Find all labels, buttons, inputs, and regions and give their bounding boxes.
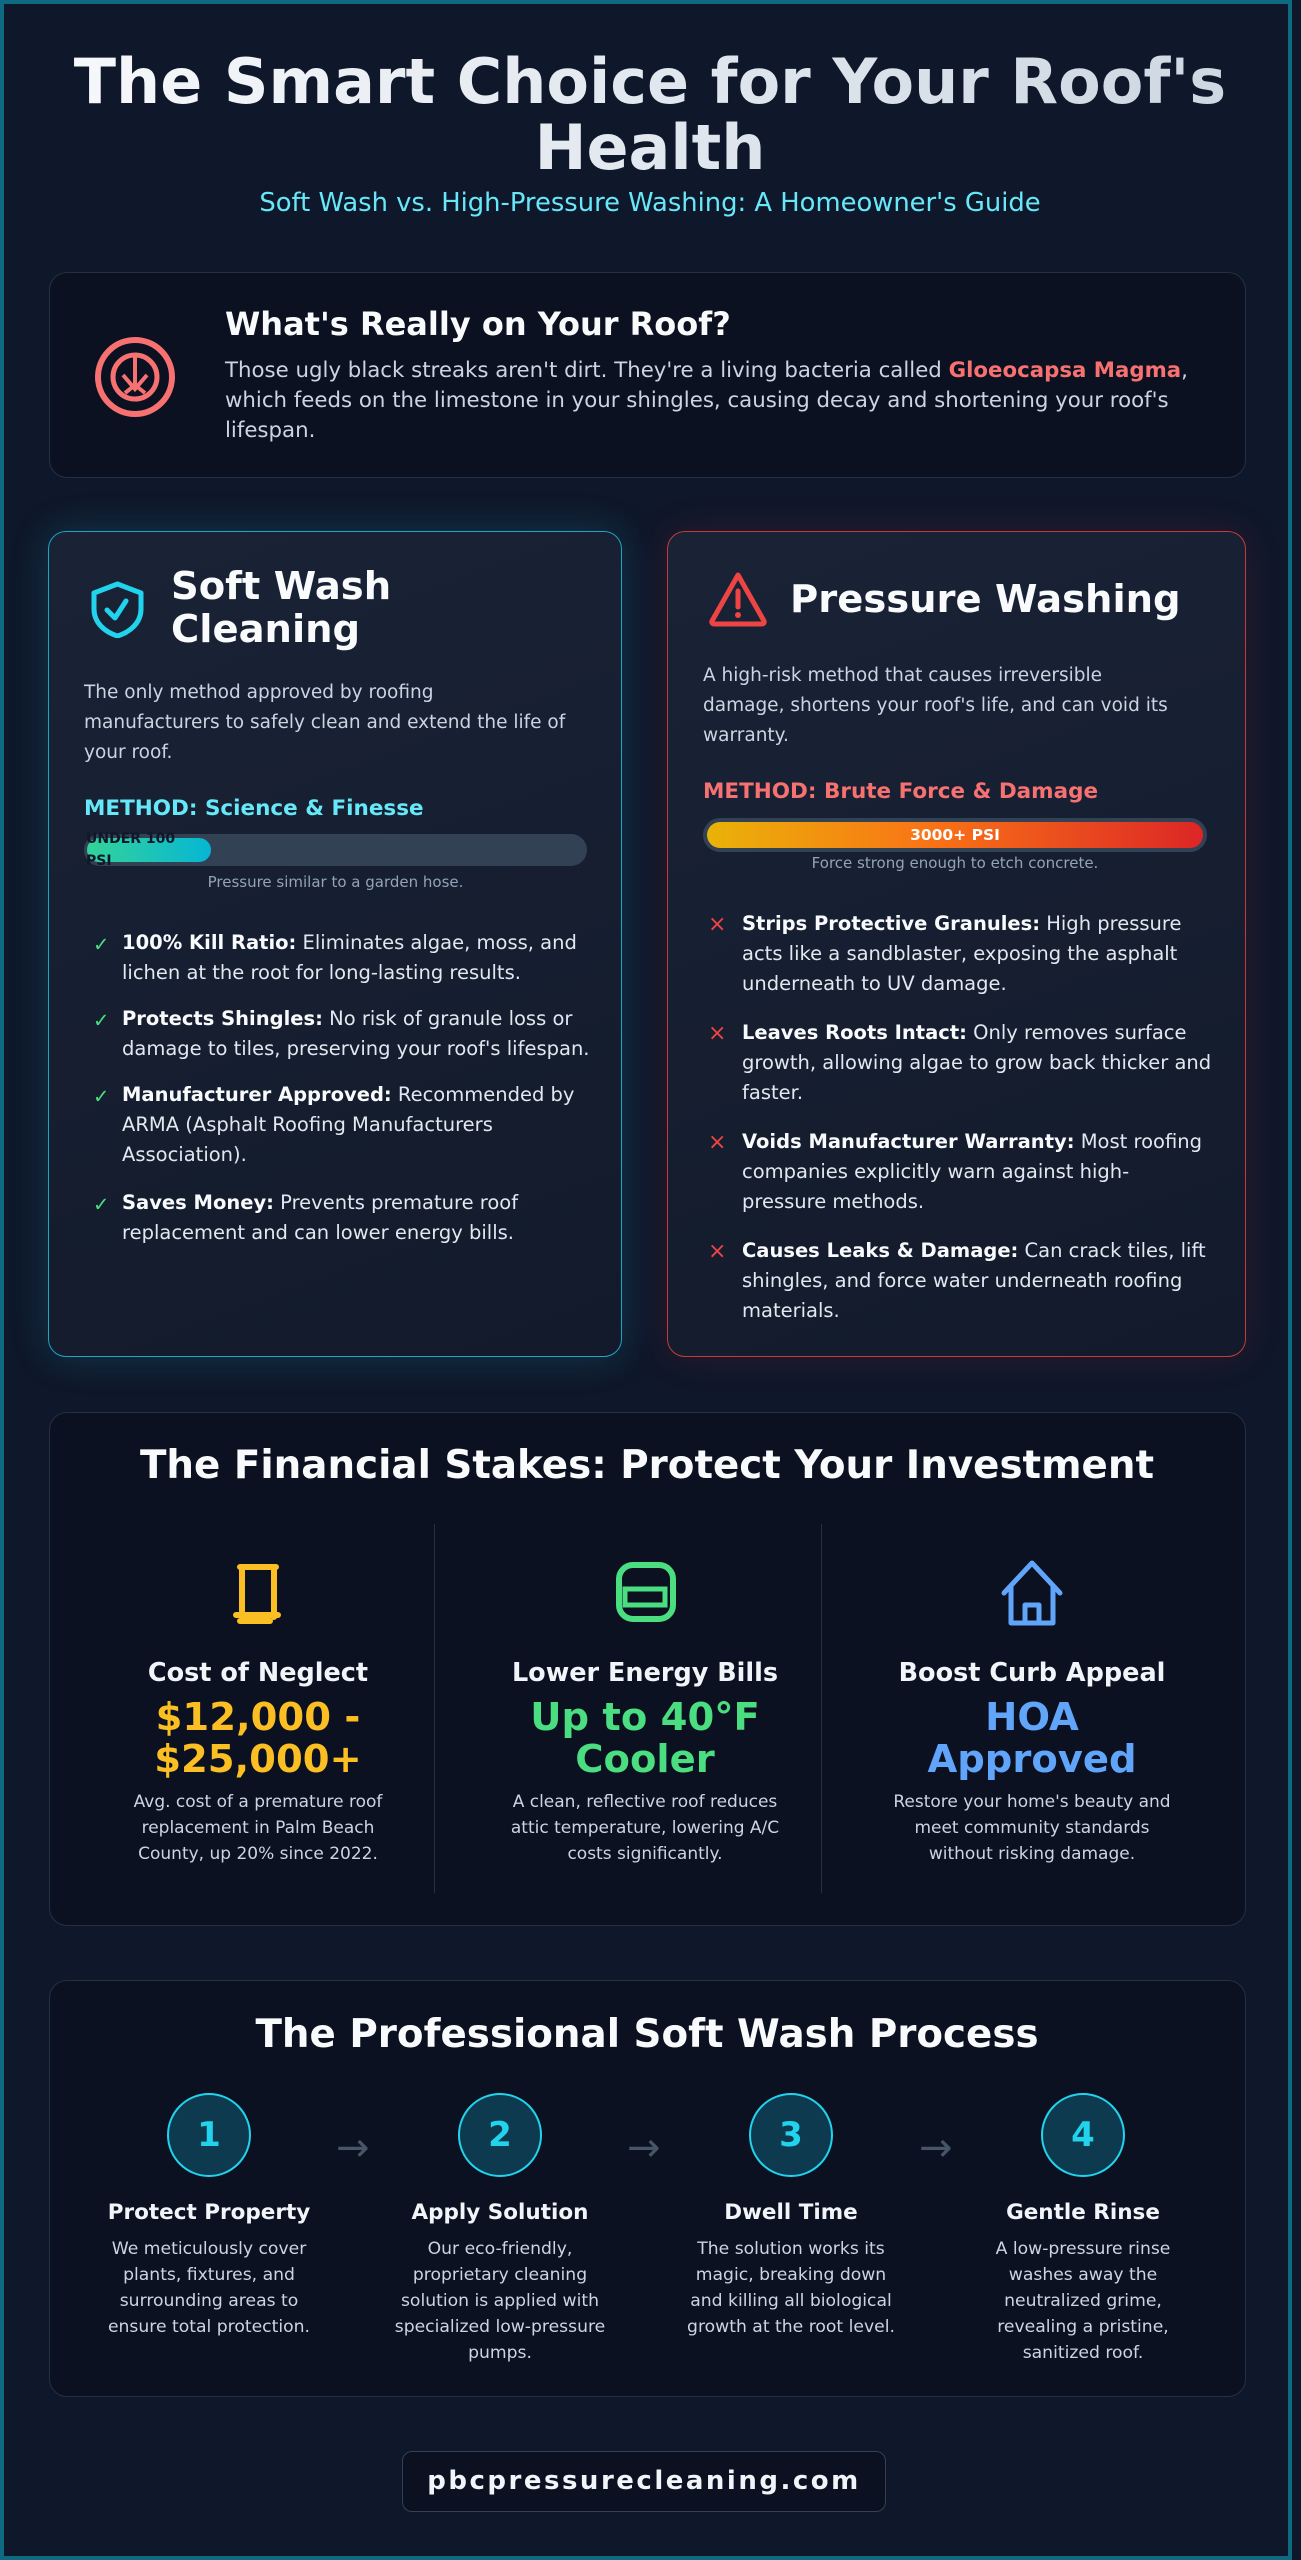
step text: ensure total protection. [108, 2317, 310, 2337]
arrow: → [919, 2125, 953, 2171]
circle number [167, 2093, 251, 2177]
step 3 [687, 2093, 895, 2337]
item: leaks [708, 1239, 1206, 1322]
label: Lower Energy Bills [512, 1658, 778, 1688]
circle number: 4 [1071, 2115, 1095, 2155]
description [893, 1792, 1171, 1864]
column: cost of neglect [134, 1564, 383, 1864]
item: strips granules: acts like a sandblaster, exposing the asphalt [742, 942, 1177, 965]
pressure bar: high [703, 818, 1207, 852]
step title: Protect Property [108, 2200, 310, 2225]
step text: A low-pressure rinse [996, 2239, 1170, 2259]
item: roots intact: growth, allowing algae to grow back thicker and [742, 1051, 1211, 1074]
item: kill ratio: ✓ [93, 933, 109, 956]
item: leaks: × [708, 1239, 726, 1264]
item: leaks: materials. [742, 1299, 840, 1322]
step text: We meticulously cover [112, 2239, 306, 2259]
item: protects shingles [93, 1007, 590, 1060]
heading: The Professional Soft Wash Process [255, 2012, 1039, 2057]
value: $12,000 - [156, 1695, 360, 1740]
value: Cooler [575, 1737, 715, 1782]
panel: financial stakes [49, 1412, 1246, 1926]
description: your roof. [84, 742, 172, 763]
step text: proprietary cleaning [413, 2265, 587, 2285]
value [927, 1695, 1137, 1782]
item: roots intact [708, 1021, 1211, 1104]
item: manufacturer approved: ✓ [93, 1085, 109, 1108]
step text [687, 2239, 895, 2337]
description: replacement in Palm Beach [142, 1818, 374, 1838]
icon: battery [616, 1562, 676, 1622]
pressure bar: soft: UNDER 100 PSI [86, 831, 175, 869]
heading [171, 564, 391, 652]
step text: specialized low-pressure [395, 2317, 605, 2337]
value: $25,000+ [154, 1737, 362, 1782]
step title: Gentle Rinse [1006, 2200, 1160, 2225]
footer: website [402, 2451, 886, 2512]
label: Cost of Neglect [148, 1658, 368, 1688]
icon: bacteria warning [95, 337, 175, 417]
item: saves money [93, 1191, 518, 1244]
pressure bar: soft [84, 834, 587, 866]
circle number [749, 2093, 833, 2177]
item: roots intact: faster. [742, 1081, 803, 1104]
footer: website: pbcpressurecleaning.com [427, 2466, 861, 2496]
circle number: 3 [779, 2115, 803, 2155]
step text: plants, fixtures, and [123, 2265, 295, 2285]
heading: Pressure Washing [790, 577, 1181, 622]
description: Avg. cost of a premature roof [134, 1792, 382, 1812]
pressure bar: high: 3000+ PSI [910, 826, 1000, 844]
icon: warning triangle [709, 572, 767, 626]
step text: washes away the [1009, 2265, 1157, 2285]
description: costs significantly. [567, 1844, 723, 1864]
value [530, 1695, 760, 1782]
column: energy bills [511, 1562, 779, 1864]
item: manufacturer approved: ARMA (Asphalt Roofing Manufacturers [122, 1113, 493, 1136]
item: voids warranty [708, 1130, 1202, 1213]
item: voids warranty: × [708, 1130, 726, 1155]
item: manufacturer approved [93, 1083, 574, 1166]
item: strips granules: × [708, 912, 726, 937]
item: manufacturer approved: Association). [122, 1143, 247, 1166]
circle number [458, 2093, 542, 2177]
item: protects shingles: ✓ [93, 1009, 109, 1032]
description: damage, shortens your roof's life, and can void its [703, 695, 1168, 716]
step text: pumps. [468, 2343, 532, 2363]
caption: Pressure similar to a garden hose. [208, 873, 463, 891]
description [511, 1792, 779, 1864]
heading: The Financial Stakes: Protect Your Investment [140, 1443, 1154, 1488]
step text: The solution works its [697, 2239, 885, 2259]
benefit list [93, 931, 590, 1244]
step text: sanitized roof. [1023, 2343, 1143, 2363]
panel: what's on your roof [49, 272, 1246, 478]
value: Up to 40°F [530, 1695, 760, 1740]
body text [224, 358, 1188, 443]
step text [108, 2239, 310, 2337]
method label: METHOD: Brute Force & Damage [703, 779, 1098, 804]
step title: Dwell Time [724, 2200, 858, 2225]
description [703, 665, 1168, 746]
step text: Our eco-friendly, [428, 2239, 572, 2259]
panel: soft wash card [48, 531, 622, 1357]
panel: pressure washing card [667, 531, 1246, 1357]
arrow: → [627, 2125, 661, 2171]
description: meet community standards [914, 1818, 1150, 1838]
description: warranty. [703, 725, 789, 746]
body text: lifespan. [225, 418, 315, 443]
circle number [1041, 2093, 1125, 2177]
step text: growth at the root level. [687, 2317, 895, 2337]
heading: Cleaning [171, 607, 360, 652]
step text [996, 2239, 1170, 2363]
icon: receipt [233, 1564, 281, 1624]
body text: Those ugly black streaks aren't dirt. They're a living bacteria called Gloeocapsa Magma, [225, 358, 1188, 383]
risk list [708, 912, 1211, 1322]
icon: shield check [92, 582, 144, 638]
label: Boost Curb Appeal [899, 1658, 1165, 1688]
step 4 [996, 2093, 1170, 2363]
item: strips granules: Strips Protective Granules: High pressure [742, 912, 1181, 935]
body text: which feeds on the limestone in your shingles, causing decay and shortening your roof's [225, 388, 1169, 413]
heading: What's Really on Your Roof? [225, 305, 731, 343]
item: leaks: shingles, and force water underneath roofing [742, 1269, 1182, 1292]
arrow: → [336, 2125, 370, 2171]
step text: revealing a pristine, [997, 2317, 1169, 2337]
step text: and killing all biological [690, 2291, 892, 2311]
item: roots intact: × [708, 1021, 726, 1046]
step title: Apply Solution [412, 2200, 588, 2225]
item: protects shingles: damage to tiles, preserving your roof's lifespan. [122, 1037, 590, 1060]
item: voids warranty: pressure methods. [742, 1190, 924, 1213]
description: without risking damage. [929, 1844, 1135, 1864]
icon: house [1002, 1560, 1062, 1626]
title: The Smart Choice for Your Roof's [74, 45, 1226, 118]
item: kill ratio [93, 931, 577, 984]
description: attic temperature, lowering A/C [511, 1818, 779, 1838]
description [134, 1792, 383, 1864]
item: leaks: Causes Leaks & Damage: Can crack tiles, lift [742, 1239, 1206, 1262]
item: protects shingles: Protects Shingles: No risk of granule loss or [122, 1007, 572, 1030]
item: kill ratio: lichen at the root for long-lasting results. [122, 961, 521, 984]
item: kill ratio: 100% Kill Ratio: Eliminates algae, moss, and [122, 931, 577, 954]
method label: METHOD: Science & Finesse [84, 796, 424, 821]
description: A high-risk method that causes irreversible [703, 665, 1102, 686]
step 2 [395, 2093, 605, 2363]
item: voids warranty: companies explicitly warn against high- [742, 1160, 1129, 1183]
title [4, 49, 1296, 181]
item: saves money: replacement and can lower energy bills. [122, 1221, 514, 1244]
description: A clean, reflective roof reduces [513, 1792, 777, 1812]
step text: solution is applied with [401, 2291, 599, 2311]
value: Approved [927, 1737, 1137, 1782]
subtitle: Soft Wash vs. High-Pressure Washing: A Homeowner's Guide [259, 188, 1041, 218]
description: County, up 20% since 2022. [138, 1844, 378, 1864]
circle number: 2 [488, 2115, 512, 2155]
step 1 [108, 2093, 310, 2337]
step text [395, 2239, 605, 2363]
column: curb appeal [893, 1560, 1171, 1864]
item: roots intact: Leaves Roots Intact: Only removes surface [742, 1021, 1187, 1044]
item: manufacturer approved: Manufacturer Approved: Recommended by [122, 1083, 574, 1106]
item: strips granules: underneath to UV damage. [742, 972, 1007, 995]
description: The only method approved by roofing [84, 682, 433, 703]
step text: neutralized grime, [1004, 2291, 1162, 2311]
item: voids warranty: Voids Manufacturer Warranty: Most roofing [742, 1130, 1202, 1153]
heading: Soft Wash [171, 564, 391, 609]
caption: Force strong enough to etch concrete. [812, 854, 1098, 872]
item: strips granules [708, 912, 1181, 995]
item: saves money: Saves Money: Prevents premature roof [122, 1191, 518, 1214]
step text: magic, breaking down [696, 2265, 886, 2285]
value [154, 1695, 362, 1782]
step text: surrounding areas to [120, 2291, 298, 2311]
description [84, 682, 566, 763]
description: manufacturers to safely clean and extend the life of [84, 712, 565, 733]
value: HOA [985, 1695, 1079, 1740]
circle number: 1 [197, 2115, 221, 2155]
item: saves money: ✓ [93, 1193, 109, 1216]
description: Restore your home's beauty and [893, 1792, 1171, 1812]
title: Health [535, 111, 765, 184]
panel: process [49, 1980, 1246, 2397]
